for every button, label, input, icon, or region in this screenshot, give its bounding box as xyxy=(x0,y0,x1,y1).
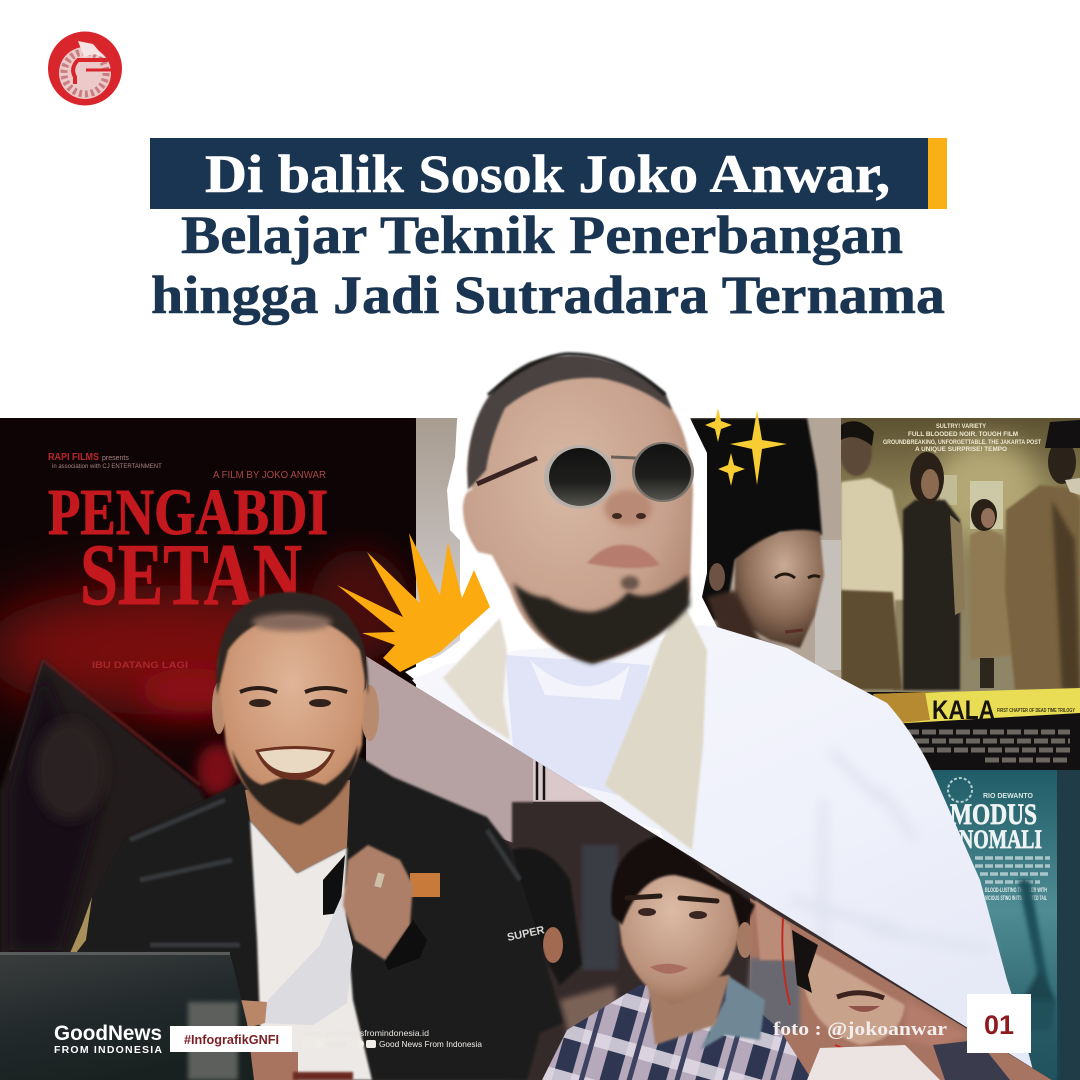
title highlight band xyxy=(150,138,928,209)
Kala figure: girl in dress xyxy=(970,528,1013,660)
forehead stubble xyxy=(252,613,332,631)
jacket badge xyxy=(410,873,440,897)
inner white shirt xyxy=(505,655,650,795)
right background arms and shirts xyxy=(750,898,1052,1080)
head xyxy=(463,359,693,663)
dark window xyxy=(582,845,618,970)
footer: website and social handles: @gnfi xyxy=(326,1040,347,1049)
poster: Modus Anomali: MODUS xyxy=(950,798,1037,831)
poster title: PENGABDI xyxy=(48,476,328,549)
Kala figure: man in trench coat xyxy=(1005,485,1080,690)
sunglasses xyxy=(477,442,694,509)
poster: Modus Anomali: ANOMALI xyxy=(945,825,1042,854)
poster: Pengabdi Setan xyxy=(0,418,416,1080)
page number box xyxy=(967,994,1031,1053)
jacket xyxy=(70,757,563,1080)
laptop xyxy=(0,952,254,1080)
Kala yellow title strip xyxy=(873,688,1080,724)
ring xyxy=(374,872,385,888)
neck xyxy=(245,780,350,873)
beard xyxy=(232,745,358,825)
title line 1: Di balik Sosok Joko Anwar, xyxy=(205,144,890,204)
cream scarf left xyxy=(443,618,510,740)
starburst accent xyxy=(337,533,490,672)
poster strip behind head xyxy=(416,418,460,658)
social icons xyxy=(303,1040,376,1048)
main portrait: Joko Anwar in white xyxy=(405,341,1035,1078)
photo credit: foto : @jokoanwar xyxy=(773,1019,948,1040)
footer: hashtag: #InfografikGNFI xyxy=(184,1033,279,1047)
sticker outline xyxy=(405,341,717,700)
sparkles xyxy=(705,408,787,486)
hand on laptop xyxy=(240,1000,267,1030)
Kala figure: man in shirt xyxy=(841,478,907,690)
footer: GoodNews logo: FROM INDONESIA xyxy=(54,1044,162,1056)
short hair xyxy=(468,355,672,490)
footer: website and social handles: www.goodnewsfromindonesia.id xyxy=(302,1028,429,1038)
title accent block xyxy=(928,138,947,209)
boy in plaid xyxy=(542,835,812,1080)
poster: Pengabdi Setan: presents xyxy=(102,455,129,462)
nostrils xyxy=(612,513,622,519)
white cloak xyxy=(412,625,1035,1078)
poster: Kala: FULL BLOODED NOIR. TOUGH FILM xyxy=(908,431,1018,438)
title xyxy=(150,138,947,325)
poster: Kala: KALA xyxy=(932,695,995,725)
second boy xyxy=(792,930,1010,1080)
mauve wall xyxy=(366,656,600,850)
Kala credit band xyxy=(866,692,1080,770)
brows and eyes xyxy=(240,688,347,692)
woman hair xyxy=(690,418,822,620)
footer: GoodNews logo: GoodNews xyxy=(54,1022,162,1045)
haunted house silhouette xyxy=(0,659,205,952)
footer: website and social handles: Good News From Indonesia xyxy=(379,1039,482,1049)
red object xyxy=(293,1072,353,1080)
footer: website and social handles xyxy=(302,1028,482,1049)
Kala poster quotes: SULTRY! VARIETY xyxy=(936,423,987,430)
smile xyxy=(255,746,335,780)
footer: GoodNews logo xyxy=(54,1022,162,1056)
hand xyxy=(343,845,413,960)
poster: Pengabdi Setan: in association with CJ ENTERTAINMENT xyxy=(52,464,162,470)
dark room xyxy=(510,800,752,895)
poster: Pengabdi Setan: A FILM BY JOKO ANWAR xyxy=(213,469,326,481)
footer: hashtag xyxy=(170,1026,292,1052)
Kala figure: woman in dark dress xyxy=(903,500,960,690)
poster tagline: IBU DATANG LAGI xyxy=(92,660,188,670)
hair xyxy=(216,592,368,695)
lips xyxy=(587,545,660,568)
title line 2: Belajar Teknik Penerbangan xyxy=(181,205,903,265)
nose xyxy=(604,490,652,526)
portrait: smiling Joko Anwar xyxy=(70,592,563,1080)
portrait: smiling Joko Anwar: SUPER xyxy=(506,924,546,944)
title line 3: hingga Jadi Sutradara Ternama xyxy=(151,265,945,325)
cream scarf right xyxy=(605,600,707,850)
poster: Modus Anomali xyxy=(932,770,1080,1080)
poster: Kala: GROUNDBREAKING, UNFORGETTABLE. THE JAKARTA POST xyxy=(883,439,1041,446)
red thread xyxy=(781,918,844,1048)
goatee beard xyxy=(513,575,690,664)
poster: Kala xyxy=(840,418,1080,770)
white mask in hand xyxy=(258,850,362,1025)
poster: Pengabdi Setan: SETAN xyxy=(80,527,302,624)
shoulder patch xyxy=(70,897,92,953)
lower diagonal photo panel xyxy=(366,656,1056,1080)
Modus Anomali headline: RIO DEWANTO xyxy=(983,791,1033,800)
ears xyxy=(361,685,379,741)
poster: Kala: A UNIQUE SURPRISE! TEMPO xyxy=(915,446,1007,453)
jacket collar flap xyxy=(323,855,345,915)
white t-shirt xyxy=(250,820,372,1080)
poster credits: RAPI FILMS xyxy=(48,451,99,463)
woman face xyxy=(735,530,824,648)
logo: GNFI circular emblem xyxy=(48,32,122,106)
background man with hat xyxy=(512,848,582,985)
Kala doors xyxy=(970,481,1003,529)
page number box: 01 xyxy=(984,1010,1014,1040)
head xyxy=(218,608,366,822)
poster: woman portrait xyxy=(690,418,841,678)
lower hand xyxy=(245,1052,298,1080)
watch xyxy=(385,920,427,970)
